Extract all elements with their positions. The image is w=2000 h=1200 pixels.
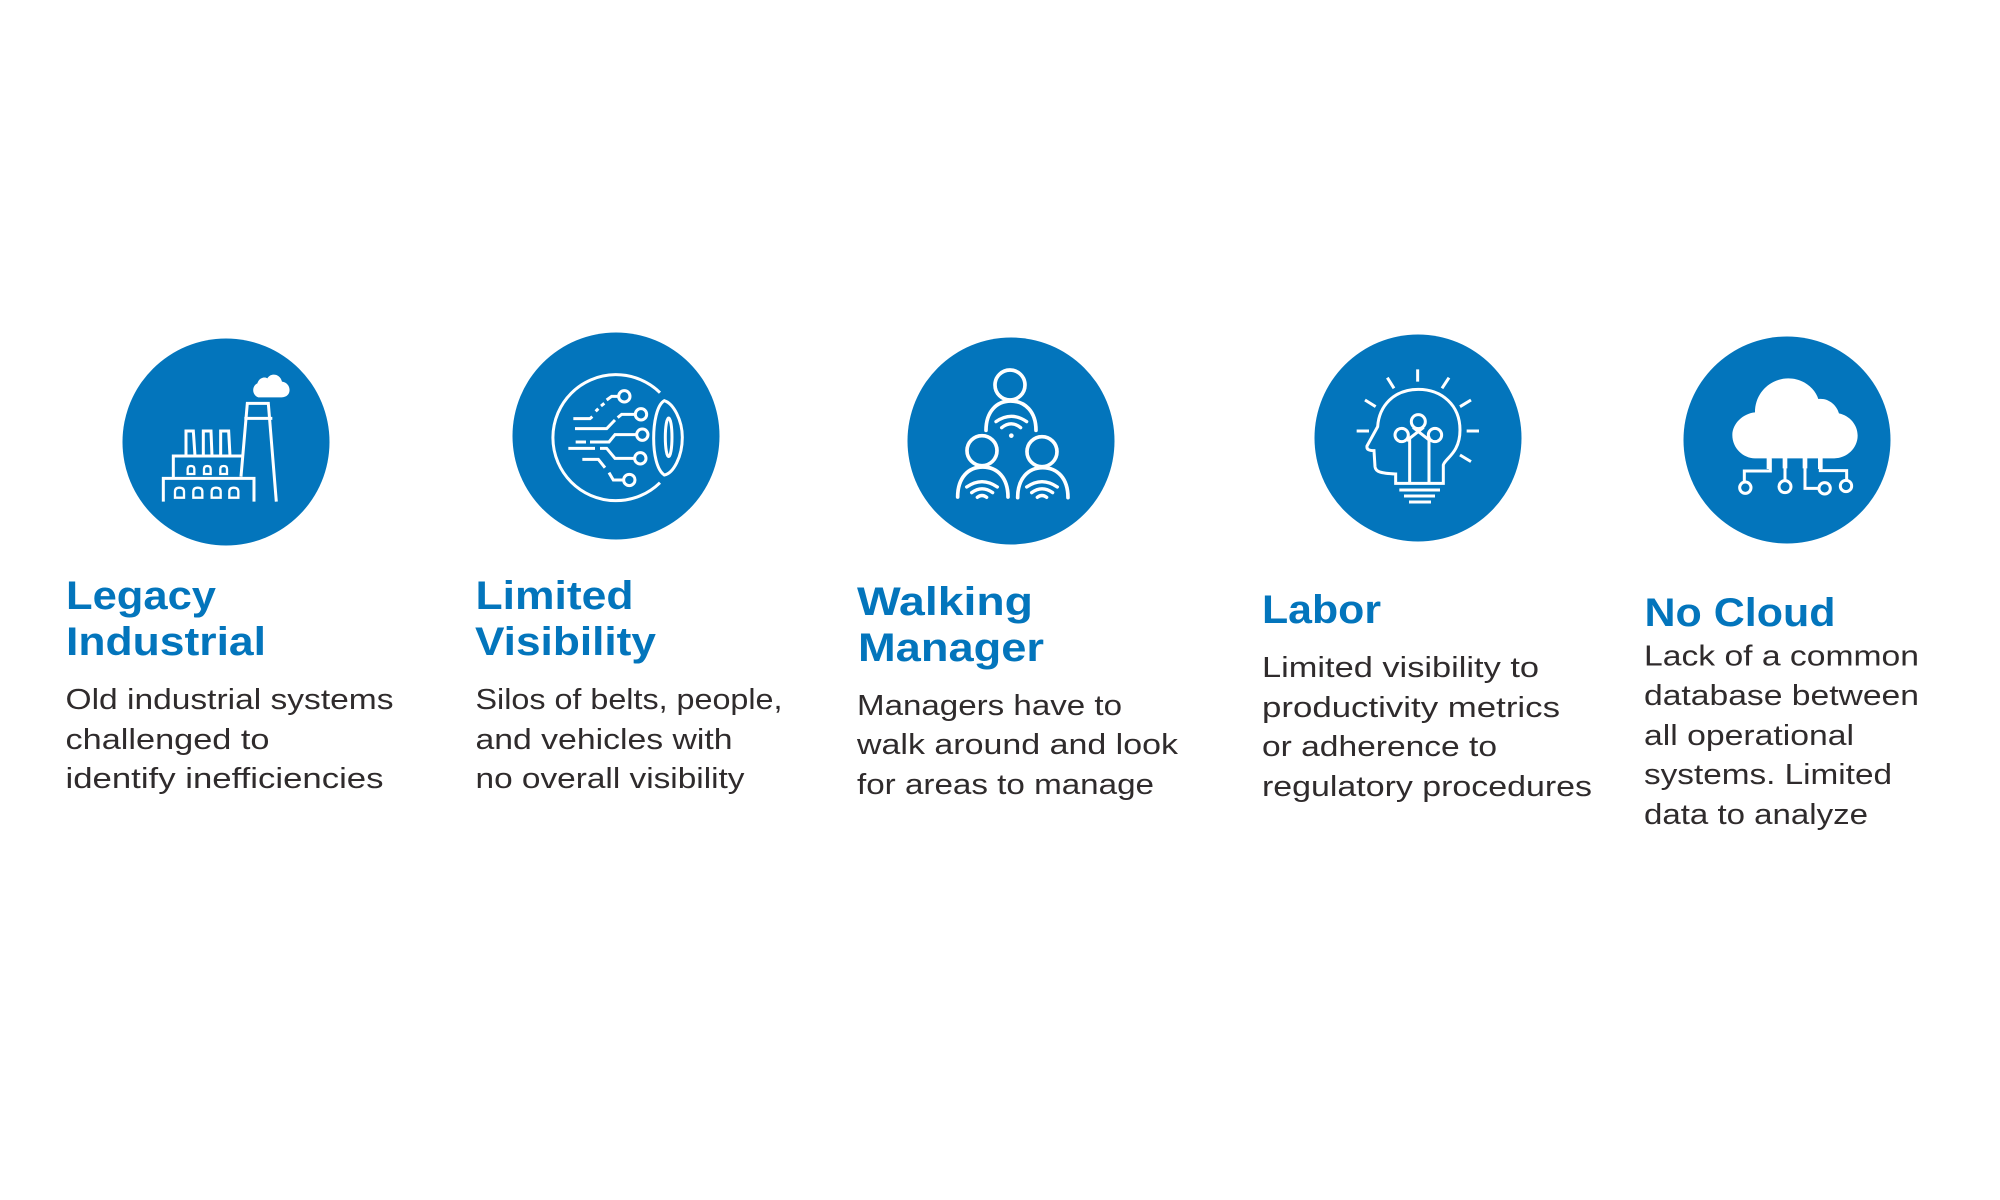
- text: Walking Manager description: for areas to manage: [857, 769, 1154, 801]
- text: Labor description: [1262, 652, 1592, 803]
- text: Labor description: regulatory procedures: [1262, 771, 1592, 803]
- icon: factory: [122, 338, 330, 546]
- text: Labor description: Limited visibility to: [1262, 652, 1539, 684]
- text: No Cloud description: database between: [1644, 680, 1919, 712]
- heading: Walking Manager: Walking: [857, 580, 1033, 624]
- heading: Labor: Labor: [1262, 588, 1381, 632]
- icon: head shaped light bulb: [1314, 334, 1522, 542]
- panel: Labor: [1262, 334, 1592, 803]
- text: No Cloud description: data to analyze: [1644, 799, 1868, 831]
- text: Limited Visibility description: and vehicles with: [476, 724, 732, 756]
- text: No Cloud description: all operational: [1644, 720, 1854, 752]
- text: Limited Visibility description: no overall visibility: [476, 763, 745, 795]
- heading: Limited Visibility: Visibility: [475, 620, 657, 664]
- heading: Legacy Industrial: Legacy: [66, 574, 217, 618]
- text: Legacy Industrial description: Old industrial systems: [66, 684, 394, 716]
- text: Limited Visibility description: Silos of belts, people,: [476, 684, 782, 716]
- panel: No Cloud: [1644, 336, 1919, 831]
- text: Labor description: productivity metrics: [1262, 692, 1560, 724]
- heading: Walking Manager: [857, 580, 1044, 670]
- heading: Limited Visibility: [475, 574, 657, 664]
- panel: Legacy Industrial: [66, 338, 394, 795]
- panel: Limited Visibility: [475, 332, 782, 795]
- text: Limited Visibility description: [476, 684, 782, 795]
- text: No Cloud description: systems. Limited: [1644, 759, 1892, 791]
- heading: Legacy Industrial: [66, 574, 266, 664]
- text: No Cloud description: [1644, 640, 1919, 831]
- text: Walking Manager description: Managers have to: [857, 690, 1122, 722]
- heading: No Cloud: No Cloud: [1644, 591, 1836, 635]
- text: Legacy Industrial description: [66, 684, 394, 795]
- text: Labor description: or adherence to: [1262, 731, 1497, 763]
- panel: Walking Manager: [856, 338, 1179, 801]
- heading: Legacy Industrial: Industrial: [66, 620, 266, 664]
- icon: eye with circuit lines: [512, 332, 720, 540]
- heading: Walking Manager: Manager: [858, 626, 1044, 670]
- text: Walking Manager description: [856, 690, 1179, 801]
- text: Legacy Industrial description: challenged to: [66, 724, 270, 756]
- text: No Cloud description: Lack of a common: [1644, 640, 1919, 672]
- icon: three connected people: [908, 338, 1114, 544]
- text: Walking Manager description: walk around and look: [856, 729, 1179, 761]
- text: Legacy Industrial description: identify inefficiencies: [66, 763, 384, 795]
- heading: Limited Visibility: Limited: [476, 574, 634, 618]
- icon: cloud with circuit lines: [1684, 336, 1890, 544]
